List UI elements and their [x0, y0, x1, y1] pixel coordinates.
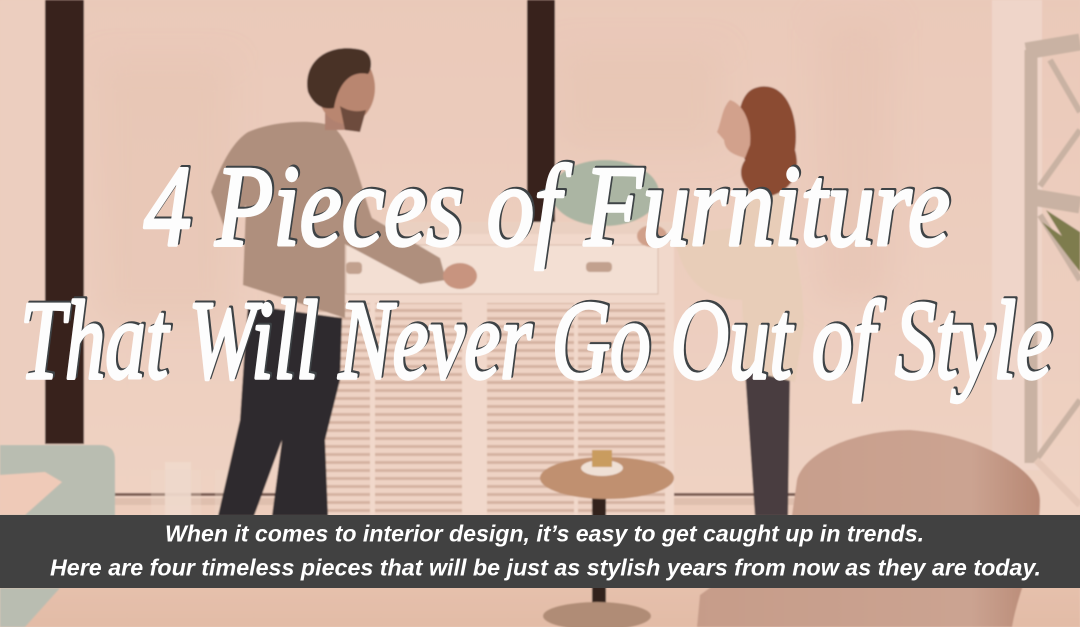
- jeans: [218, 305, 342, 516]
- sofa at left: [0, 445, 115, 627]
- plant: [1042, 210, 1080, 272]
- sweater: [672, 178, 804, 382]
- shelf at right: [1026, 42, 1080, 505]
- subtitle line 1: When it comes to interior design, it’s easy to get caught up in trends.: [165, 520, 924, 546]
- man: [211, 48, 477, 516]
- hand: [443, 263, 477, 289]
- hand: [637, 225, 667, 247]
- window frames: [45, 0, 555, 444]
- round table with cup: [540, 450, 674, 627]
- jeans: [745, 370, 790, 516]
- woman: [637, 86, 804, 516]
- hair: [738, 86, 797, 198]
- title: [20, 141, 1054, 403]
- cabinet: [316, 222, 674, 517]
- armchair: [697, 430, 1040, 627]
- vases on window ledge: [151, 462, 235, 516]
- subtitle banner: [0, 515, 1080, 588]
- globe ornament: [551, 160, 659, 226]
- subtitle line 2: Here are four timeless pieces that will be just as stylish years from now as they are today.: [50, 554, 1041, 580]
- neck and head: [325, 100, 353, 130]
- face: [717, 100, 750, 158]
- sweater: [211, 122, 446, 318]
